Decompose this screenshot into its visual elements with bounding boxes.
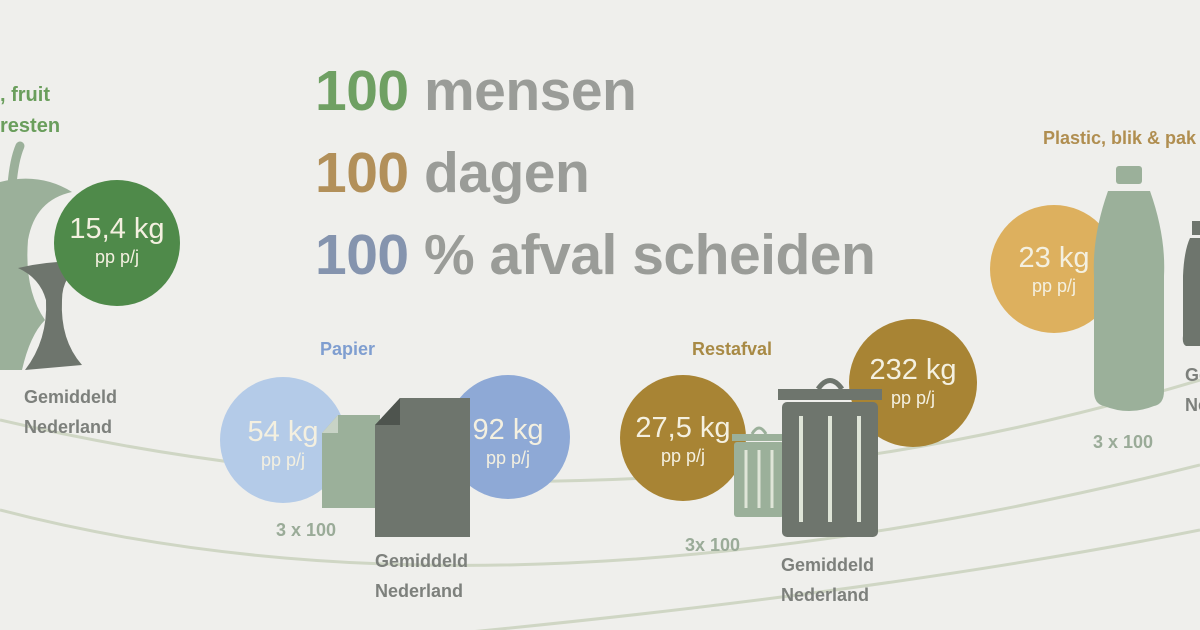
heading: Plastic: Plastic, blik & pak bbox=[1043, 128, 1196, 148]
label: 3 x 100 plastic: 3 x 100 bbox=[1093, 432, 1153, 452]
label: Gemiddeld Nederland (gft): Nederland bbox=[24, 417, 112, 437]
circle: 54 kg: pp p/j bbox=[261, 450, 305, 470]
circle: 232 kg: 232 kg bbox=[869, 354, 957, 386]
label: Gemiddeld Nederland papier: Gemiddeld bbox=[375, 551, 468, 571]
circle: 54 kg bbox=[220, 377, 346, 503]
title: 100 % afval scheiden bbox=[315, 223, 875, 287]
circle: 232 kg bbox=[849, 319, 977, 447]
heading: groente fruit: , fruit bbox=[0, 84, 50, 106]
icon: paper sheets bbox=[322, 398, 470, 537]
circle: 92 kg bbox=[446, 375, 570, 499]
icon: apple cores bbox=[0, 142, 82, 370]
circle: 23 kg: 23 kg bbox=[1019, 242, 1089, 274]
label: Gemiddeld Nederland papier: Nederland bbox=[375, 581, 463, 601]
label: Gemiddeld Nederland rest bbox=[781, 555, 874, 605]
circle: 27,5 kg: 27,5 kg bbox=[635, 412, 731, 444]
circle: 15,4 kg: pp p/j bbox=[95, 247, 139, 267]
circle: 15,4 kg: 15,4 kg bbox=[69, 213, 165, 245]
icon: bottles bbox=[1094, 166, 1200, 411]
circle: 232 kg: pp p/j bbox=[891, 388, 935, 408]
label: Gemiddeld Nederland (gft): Gemiddeld bbox=[24, 387, 117, 407]
heading: Papier: Papier bbox=[320, 339, 375, 359]
label: Gemiddeld Nederland (gft) bbox=[24, 387, 117, 437]
label: Gemiddeld Nederland plastic bbox=[1185, 365, 1200, 415]
circle: 92 kg: 92 kg bbox=[473, 414, 543, 446]
icon: bins bbox=[732, 378, 882, 537]
circle: 54 kg: 54 kg bbox=[248, 416, 318, 448]
title: 100 mensen bbox=[315, 59, 636, 123]
label: Gemiddeld Nederland papier bbox=[375, 551, 468, 601]
circle: 92 kg: pp p/j bbox=[486, 448, 530, 468]
title bbox=[315, 59, 875, 287]
circle: 23 kg: pp p/j bbox=[1032, 276, 1076, 296]
label: 3 x 100 papier: 3 x 100 bbox=[276, 520, 336, 540]
circle: 27,5 kg: pp p/j bbox=[661, 446, 705, 466]
heading: Restafval: Restafval bbox=[692, 339, 772, 359]
title: 100 dagen bbox=[315, 141, 589, 205]
heading: groente fruit bbox=[0, 84, 60, 137]
circle: 23 kg bbox=[990, 205, 1118, 333]
circle: 27,5 kg bbox=[620, 375, 746, 501]
label: Gemiddeld Nederland rest: Nederland bbox=[781, 585, 869, 605]
circle: 15,4 kg bbox=[54, 180, 180, 306]
label: Gemiddeld Nederland rest: Gemiddeld bbox=[781, 555, 874, 575]
heading: groente fruit: resten bbox=[0, 115, 60, 137]
label: 3x 100 rest: 3x 100 bbox=[685, 535, 740, 555]
